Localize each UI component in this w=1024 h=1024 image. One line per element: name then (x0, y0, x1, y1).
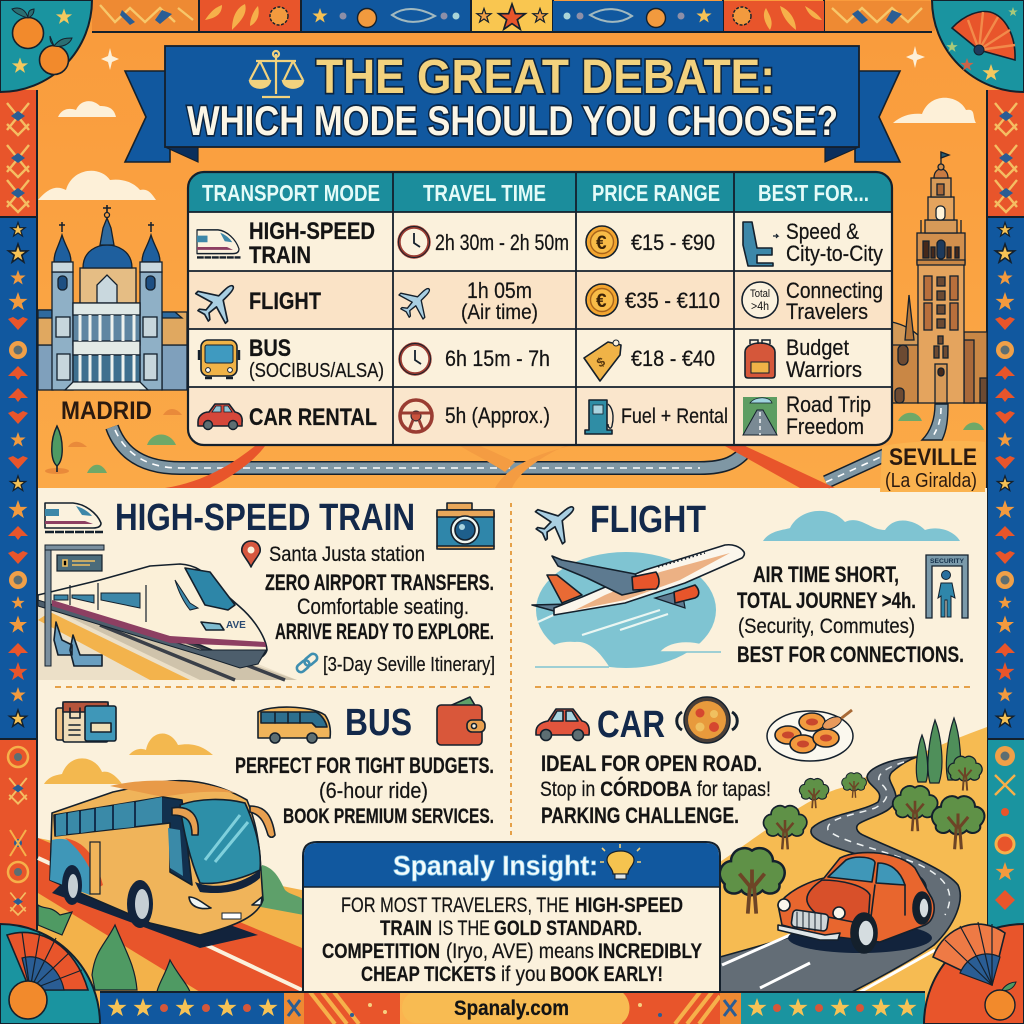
label: Madrid: MADRID (61, 397, 152, 425)
icon: wallet (437, 697, 485, 745)
panel: high-speed train (38, 497, 495, 680)
body text: COMPETITION (322, 940, 440, 963)
row: high-speed train: City-to-City (786, 241, 883, 266)
illustration: AVE train on platform: AVE (226, 620, 246, 631)
panel: cream lower section (38, 488, 987, 992)
label: Seville (880, 441, 985, 492)
table header: TRAVEL TIME (423, 180, 546, 206)
illustration: plane in the sky (532, 545, 744, 668)
row: high-speed train: 2h 30m - 2h 50m (435, 230, 569, 255)
row: flight: Total (750, 288, 770, 300)
row: high-speed train (197, 218, 883, 269)
heading: FLIGHT (590, 499, 706, 541)
panel: flight (527, 491, 968, 668)
body text: (Iryo, AVE) means (446, 940, 594, 963)
text block: ARRIVE READY TO EXPLORE. (275, 619, 494, 644)
illustration: winding road (720, 757, 960, 992)
row: bus: 6h 15m - 7h (445, 346, 550, 371)
footer pill: Spanaly.com (454, 997, 569, 1020)
callout: Spanaly insight (303, 842, 720, 992)
row: flight (188, 271, 883, 331)
body text: IS THE (438, 917, 490, 940)
row: high-speed train: TRAIN (249, 242, 311, 269)
body text: HIGH-SPEED (575, 894, 683, 917)
landmark: Seville Giralda (892, 152, 987, 403)
route road across map (112, 427, 885, 488)
text block: (6-hour ride) (319, 778, 428, 803)
row: high-speed train: €15 - €90 (631, 230, 715, 255)
icon: cypress and bushes (45, 409, 182, 474)
icon: location pin (242, 541, 260, 567)
text block: Stop in CÓRDOBA for tapas! (540, 777, 771, 801)
comparison table (188, 172, 892, 445)
icon: security gate (926, 555, 968, 618)
corner: bottom left fan (0, 924, 100, 1024)
body text: INCREDIBLY (598, 940, 702, 963)
heading line 1: THE GREAT DEBATE: (316, 51, 775, 104)
text block: (Security, Commutes) (738, 615, 915, 638)
landmark: Madrid cathedral (38, 205, 187, 390)
dividers (55, 503, 970, 835)
icon: shrubs (38, 905, 190, 992)
row: flight: Travelers (786, 299, 868, 324)
row: car rental: Fuel + Rental (621, 405, 728, 428)
icon: mini car (536, 709, 589, 740)
title banner (125, 46, 900, 162)
road stub and bushes near Seville (898, 404, 984, 440)
body text: FOR MOST TRAVELERS, THE (341, 894, 569, 917)
illustration: hill landscape (720, 727, 987, 992)
text block: AIR TIME SHORT, (753, 562, 899, 587)
icon: mini train (45, 503, 103, 532)
row: bus: $ (594, 353, 608, 370)
text block: Comfortable seating. (297, 594, 469, 619)
heading: Spanaly Insight: (393, 850, 598, 881)
text block: TOTAL JOURNEY >4h. (737, 588, 916, 613)
label: Seville: SEVILLE (889, 444, 977, 471)
row: bus: (SOCIBUS/ALSA) (249, 360, 384, 382)
body text: GOLD STANDARD. (494, 917, 642, 940)
corner: top right fan (932, 0, 1024, 92)
text block (235, 753, 494, 828)
text block (737, 562, 964, 667)
row: bus (199, 335, 862, 382)
footer pill (402, 992, 630, 1023)
text block: BEST FOR CONNECTIONS. (737, 642, 964, 667)
table header: BEST FOR... (758, 180, 869, 206)
right column (987, 90, 1024, 930)
decorative clouds and sparkles (38, 46, 976, 200)
row: car rental: Road Trip (786, 392, 871, 417)
corner: top left oranges (0, 0, 92, 92)
text block (265, 543, 495, 676)
label: Seville: (La Giralda) (885, 470, 977, 492)
illustration: AVE train on platform (38, 545, 297, 680)
heading line 2: WHICH MODE SHOULD YOU CHOOSE? (187, 97, 838, 144)
row: bus: €18 - €40 (631, 346, 715, 371)
row: bus: Warriors (786, 357, 862, 382)
illustration: road and hills (38, 838, 304, 992)
illustration: coach (50, 781, 275, 948)
text block: ZERO AIRPORT TRANSFERS. (265, 570, 494, 595)
panel: car (536, 697, 987, 992)
row: flight: 1h 05m (467, 278, 532, 303)
body text: CHEAP TICKETS (361, 963, 496, 986)
row: flight: FLIGHT (249, 288, 321, 315)
illustration: olive trees (720, 718, 984, 914)
row: car rental (198, 392, 871, 439)
icon: camera (437, 503, 494, 549)
text block: BOOK PREMIUM SERVICES. (283, 805, 494, 828)
text block: PERFECT FOR TIGHT BUDGETS. (235, 753, 494, 778)
row: bus: BUS (249, 335, 291, 362)
body text: if you (501, 963, 546, 986)
icon: mini bus (258, 707, 330, 743)
icon: tapas plate (767, 710, 853, 761)
table header: PRICE RANGE (592, 180, 720, 206)
icon: paella (677, 697, 737, 743)
icon: tickets (56, 702, 116, 742)
left column (0, 90, 37, 930)
text block (540, 751, 771, 828)
row: high-speed train: Speed & (786, 219, 859, 244)
body text: TRAIN (380, 917, 432, 940)
heading: HIGH-SPEED TRAIN (115, 497, 415, 539)
row: flight: (Air time) (461, 301, 538, 324)
table header (202, 180, 869, 206)
illustration: orange car (778, 853, 934, 953)
row: high-speed train: HIGH-SPEED (249, 218, 375, 245)
clouds (44, 734, 213, 784)
row: flight: >4h (751, 299, 769, 313)
text block: [3-Day Seville Itinerary] (323, 654, 495, 676)
panel: bus (38, 697, 494, 992)
corner: bottom right fan (924, 922, 1024, 1024)
row: flight: Connecting (786, 278, 883, 303)
row: car rental: CAR RENTAL (249, 404, 377, 431)
icon: scales (250, 51, 303, 97)
icon: security gate: SECURITY (930, 558, 965, 565)
top band (92, 0, 935, 32)
row: car rental: 5h (Approx.) (445, 403, 550, 428)
body text (322, 894, 702, 986)
row: bus: Budget (786, 335, 849, 360)
row: car rental: Freedom (786, 414, 864, 439)
icon: mini plane (527, 491, 587, 551)
table header: TRANSPORT MODE (202, 180, 380, 206)
heading: CAR (597, 704, 665, 746)
heading: BUS (345, 702, 412, 744)
icon: cloud (763, 511, 960, 541)
bottom band (100, 992, 925, 1024)
row: flight: €35 - €110 (625, 288, 720, 313)
icon: light bulb (600, 844, 641, 879)
text block: Santa Justa station (269, 543, 425, 566)
text block: IDEAL FOR OPEN ROAD. (541, 751, 762, 776)
text block: PARKING CHALLENGE. (541, 803, 739, 828)
body text: BOOK EARLY! (550, 963, 663, 986)
